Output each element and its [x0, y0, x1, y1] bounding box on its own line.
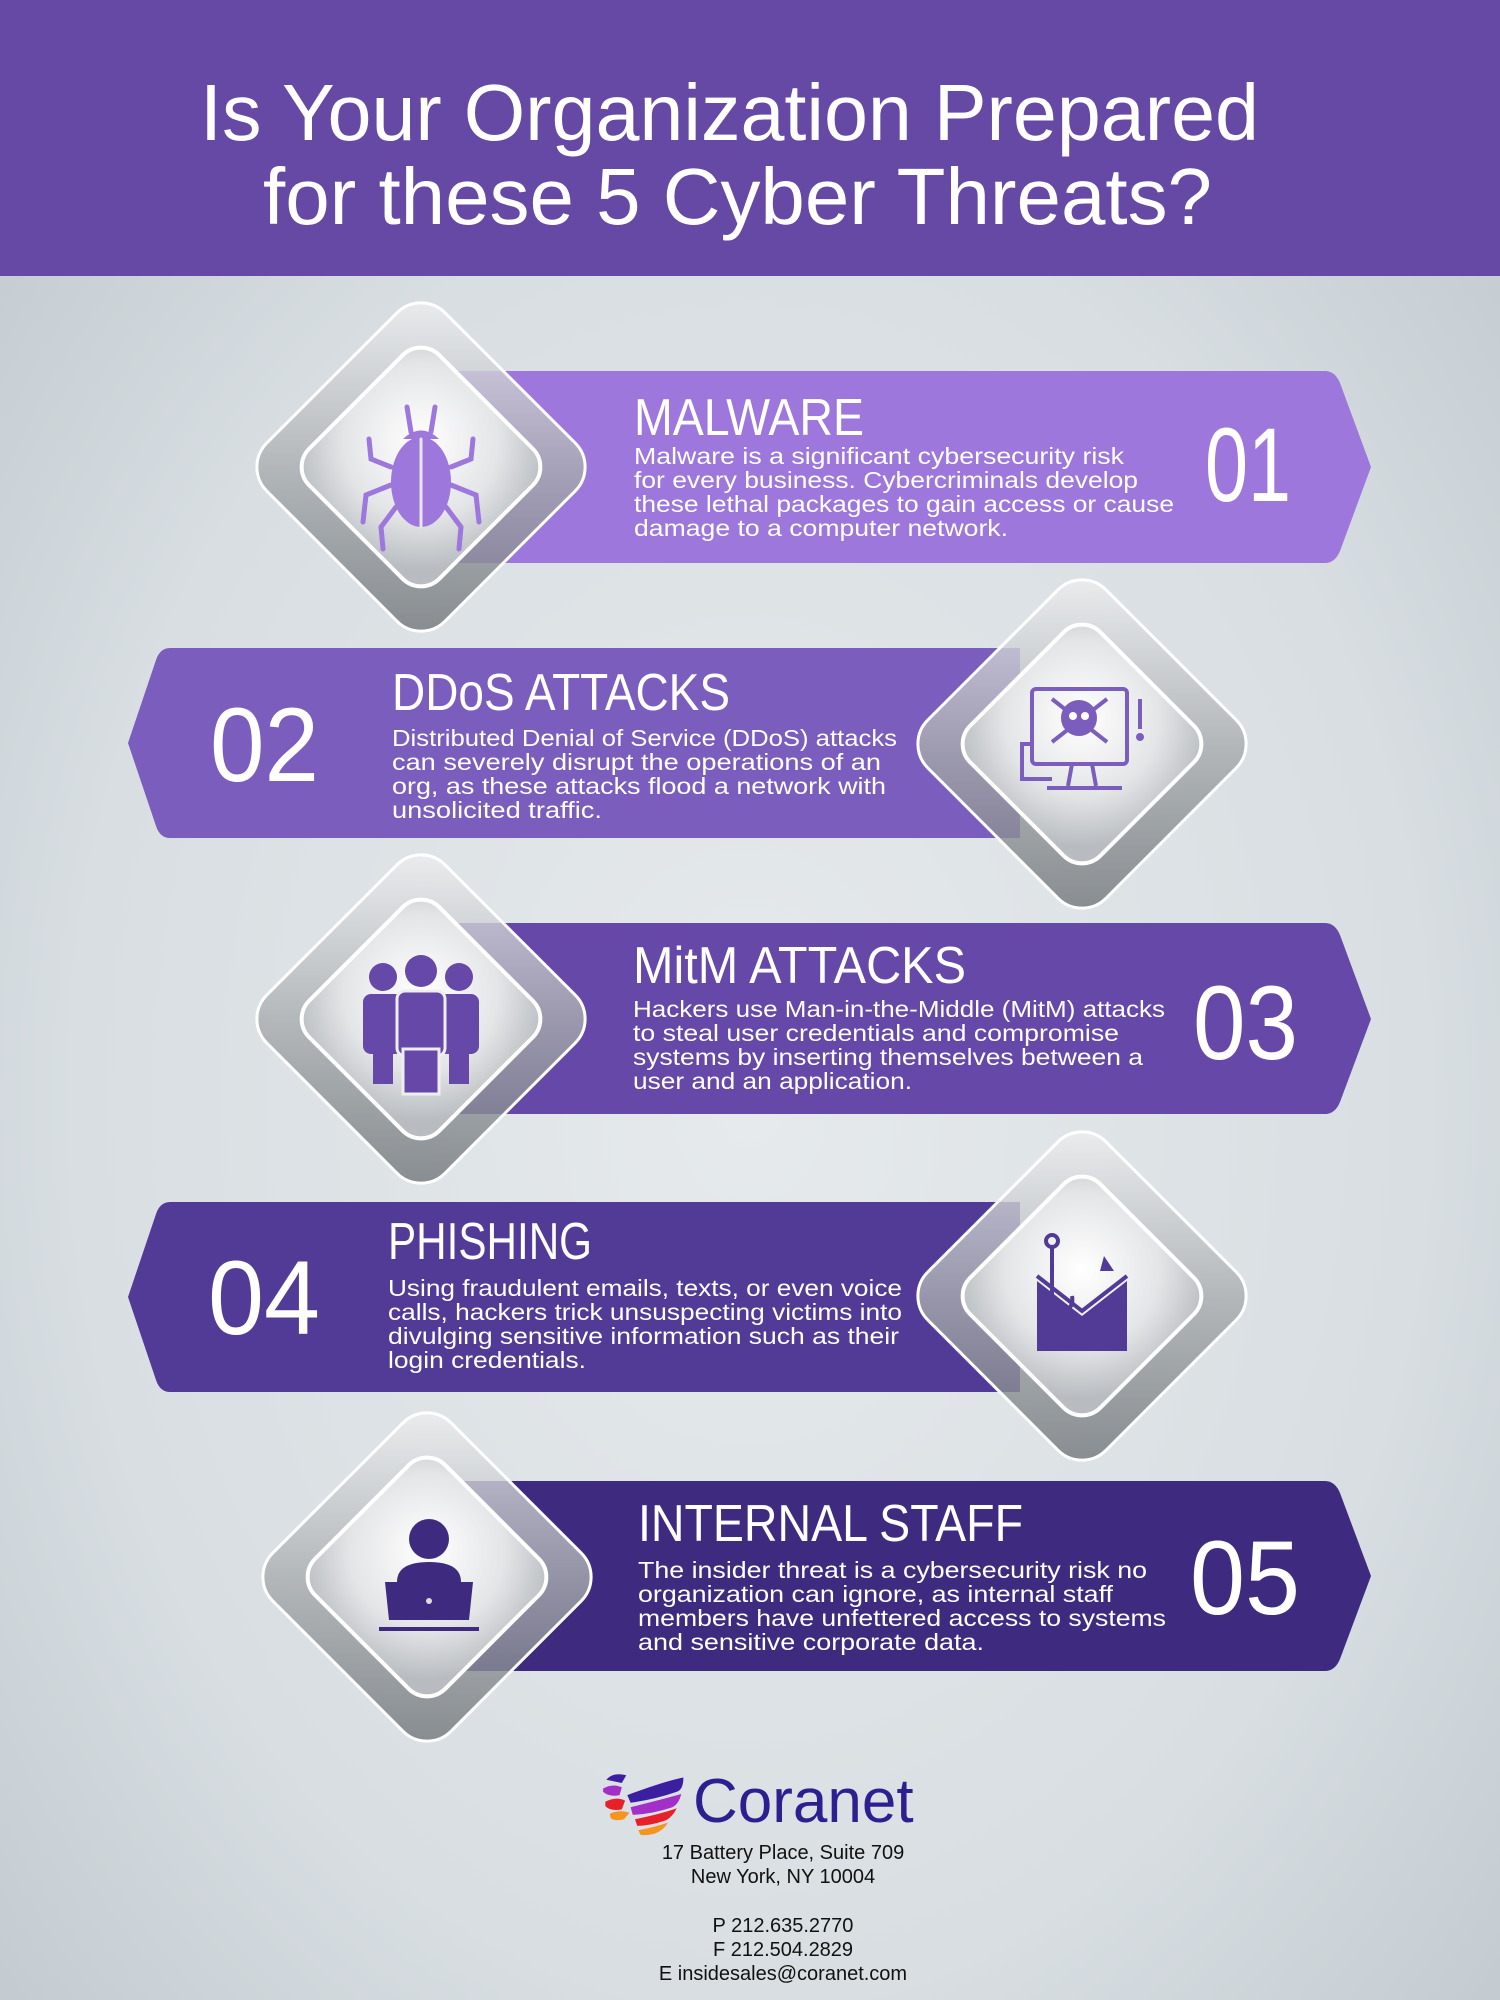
text: mitm description: to steal user credentials and compromise	[633, 1020, 1119, 1046]
text: phishing description	[388, 1275, 902, 1373]
number 04: 04	[208, 1240, 320, 1357]
heading: ddos: DDoS ATTACKS	[392, 664, 730, 722]
diamond: malware	[243, 289, 599, 645]
heading: malware: MALWARE	[634, 389, 864, 447]
text: mitm description: Hackers use Man-in-the-Middle (MitM) attacks	[633, 996, 1165, 1022]
logo: Coranet: Coranet	[693, 1767, 914, 1836]
text: mitm description: user and an application.	[633, 1068, 912, 1094]
panel: malware	[243, 289, 1371, 645]
icon: envelope with hook	[1037, 1235, 1127, 1351]
contact info	[659, 1842, 907, 1985]
diamond: ddos	[904, 566, 1260, 922]
contact info: F 212.504.2829	[713, 1939, 853, 1961]
heading: phishing: PHISHING	[388, 1213, 592, 1271]
number 03: 03	[1193, 965, 1298, 1082]
icon: bug	[363, 407, 479, 549]
text: internal staff description: and sensitive corporate data.	[638, 1629, 984, 1655]
title	[200, 68, 1259, 241]
contact info: 17 Battery Place, Suite 709	[662, 1842, 904, 1864]
text: internal staff description	[638, 1557, 1166, 1655]
text: mitm description: systems by inserting themselves between a	[633, 1044, 1143, 1070]
text: ddos description: Distributed Denial of Service (DDoS) attacks	[392, 725, 897, 751]
title: Is Your Organization Prepared	[200, 68, 1259, 157]
text: phishing description: calls, hackers trick unsuspecting victims into	[388, 1299, 902, 1325]
text: malware description	[634, 443, 1174, 541]
header banner	[0, 0, 1500, 276]
heading: mitm: MitM ATTACKS	[633, 937, 966, 995]
text: phishing description: divulging sensitive information such as their	[388, 1323, 899, 1349]
text: internal staff description: The insider threat is a cybersecurity risk no	[638, 1557, 1147, 1583]
number 05: 05	[1190, 1520, 1300, 1637]
diamond: phishing	[904, 1118, 1260, 1474]
icon: skull monitor	[1022, 689, 1142, 788]
title: for these 5 Cyber Threats?	[263, 152, 1212, 241]
text: ddos description	[392, 725, 897, 823]
icon: people group	[363, 955, 479, 1094]
panel: ddos	[128, 566, 1260, 922]
text: malware description: Malware is a significant cybersecurity risk	[634, 443, 1125, 469]
text: mitm description	[633, 996, 1165, 1094]
text: malware description: damage to a computer network.	[634, 515, 1008, 541]
panel: internal staff	[249, 1399, 1371, 1755]
text: internal staff description: members have unfettered access to systems	[638, 1605, 1166, 1631]
icon: person at laptop	[379, 1519, 479, 1631]
text: ddos description: can severely disrupt the operations of an	[392, 749, 881, 775]
diamond: internal staff	[249, 1399, 605, 1755]
text: phishing description: login credentials.	[388, 1347, 586, 1373]
diamond: mitm	[243, 841, 599, 1197]
contact info: P 212.635.2770	[713, 1915, 853, 1937]
text: malware description: for every business. Cybercriminals develop	[634, 467, 1138, 493]
contact info: New York, NY 10004	[691, 1866, 875, 1888]
text: ddos description: org, as these attacks flood a network with	[392, 773, 886, 799]
text: phishing description: Using fraudulent emails, texts, or even voice	[388, 1275, 902, 1301]
number 02: 02	[210, 687, 319, 804]
panel: phishing	[128, 1118, 1260, 1474]
heading: internal staff: INTERNAL STAFF	[638, 1495, 1023, 1553]
text: malware description: these lethal packages to gain access or cause	[634, 491, 1174, 517]
text: ddos description: unsolicited traffic.	[392, 797, 602, 823]
panel: mitm	[243, 841, 1371, 1197]
number 01: 01	[1205, 407, 1291, 524]
contact info: E insidesales@coranet.com	[659, 1963, 907, 1985]
text: internal staff description: organization can ignore, as internal staff	[638, 1581, 1114, 1607]
